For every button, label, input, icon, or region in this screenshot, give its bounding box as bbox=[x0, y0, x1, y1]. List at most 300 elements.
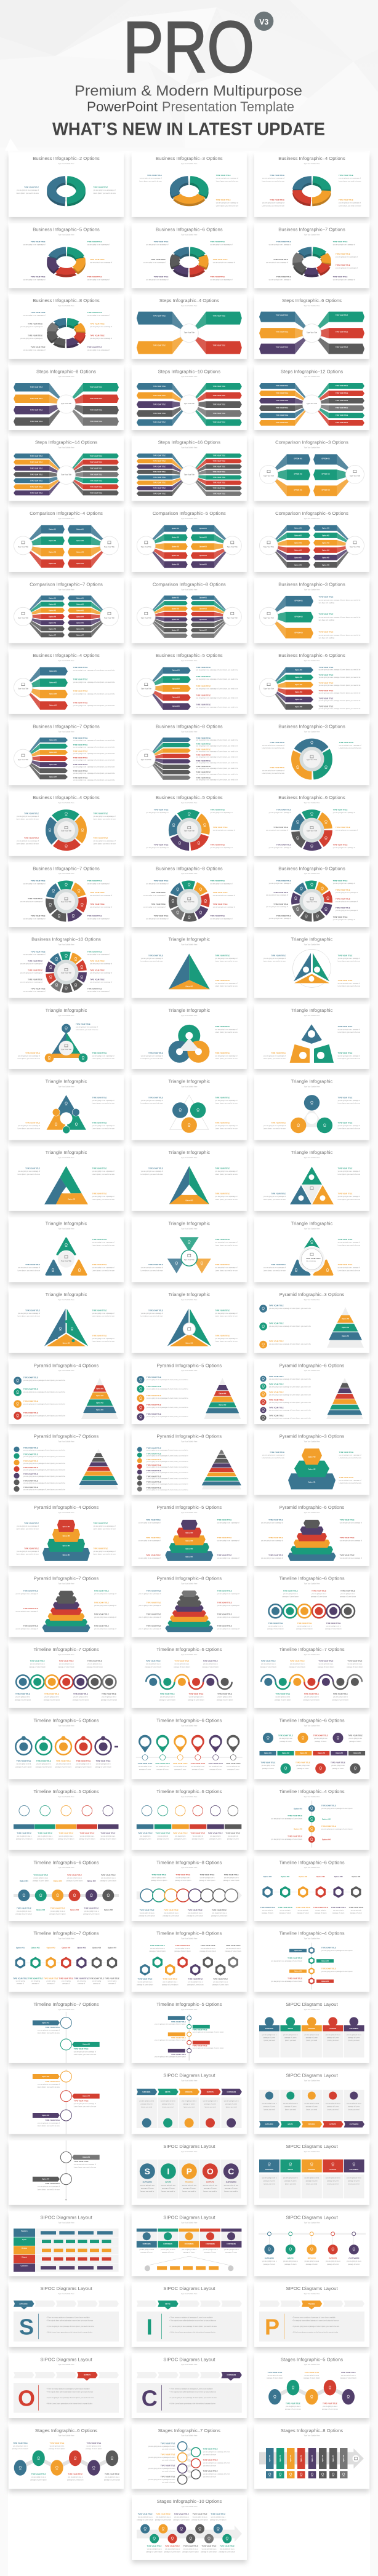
slide: comparison 4: Option #04 bbox=[76, 563, 84, 565]
slide: timeline rings 6: passage of Lorem Ipsum bbox=[325, 1628, 342, 1630]
slide: timeline loops 5: passage of Lorem Ipsum bbox=[95, 1766, 111, 1768]
slide: pyramid 7: TYPE YOUR TITLE bbox=[23, 1479, 38, 1482]
slide: business banners 7: TYPE YOUR TITLE bbox=[73, 744, 87, 746]
slide: triangle 16: Lorem Ipsum, you need to be sure bbox=[140, 1316, 163, 1318]
slide: triangle 5: TYPE YOUR TITLE bbox=[338, 1052, 353, 1054]
slide: stages 10: passage of Lorem Ipsum bbox=[219, 2551, 235, 2553]
slide: business ring 5: you are going to use a passage of bbox=[23, 244, 46, 246]
slide: steps 10 bbox=[132, 365, 247, 430]
slide: timeline alternating 6: Option #05 bbox=[336, 1752, 344, 1754]
slide: hex pyramid 8: Pyramid Infographic–8 Options bbox=[157, 1576, 222, 1581]
slide: timeline zigzag 8: TYPE YOUR TITLE bbox=[175, 1944, 190, 1947]
slide: vertical timeline part 3: TYPE YOUR TITLE bbox=[45, 2182, 60, 2185]
slide: triangle 11: Lorem Ipsum, you need to be sure bbox=[338, 1199, 361, 1201]
slide: steps 4: TYPE YOUR TITLE bbox=[213, 316, 225, 317]
slide: business ring 3: Type Your Subtitle Here bbox=[181, 163, 198, 165]
slide: timeline rings 6: TYPE YOUR TITLE bbox=[283, 1589, 298, 1592]
slide: vertical timeline part 1: TYPE YOUR TITLE bbox=[45, 2026, 60, 2029]
slide: timeline loops 5: TYPE YOUR TITLE bbox=[76, 1760, 91, 1762]
slide: triangle 10: TYPE YOUR TITLE bbox=[215, 1167, 230, 1170]
slide: timeline arrow 8: TYPE YOUR TITLE bbox=[188, 1909, 203, 1912]
slide: sipoc steps flow: passage of Lorem bbox=[204, 2252, 216, 2254]
slide: donut 4: Lorem Ipsum, you need to be sure bbox=[94, 818, 116, 820]
slide: business banners 5: Option #02 bbox=[172, 678, 180, 680]
slide: business ring 5: TYPE YOUR TITLE bbox=[90, 258, 105, 261]
slide: timeline rings 7: you are going to use a bbox=[59, 1663, 74, 1665]
slide: triangle 8: TYPE YOUR TITLE bbox=[338, 1096, 353, 1099]
slide: triangle 12: TYPE YOUR TITLE bbox=[92, 1263, 107, 1266]
slide: timeline rings 6: TYPE YOUR TITLE bbox=[297, 1622, 312, 1624]
slide: hex pyramid 4 bbox=[9, 1501, 124, 1566]
slide: timeline vertical bars 4: Option #03 bbox=[294, 1971, 302, 1973]
slide: triangle 9: Lorem Ipsum, you need to be sure bbox=[92, 1174, 115, 1175]
slide: triangle 3: Lorem Ipsum, you need to be sure bbox=[18, 1058, 41, 1060]
slide: comparison 6: Option #06 bbox=[294, 564, 302, 566]
slide: timeline bars 6: TYPE YOUR TITLE bbox=[156, 1832, 171, 1835]
slide: hex pyramid 3: Option #01 bbox=[308, 1481, 316, 1483]
slide: donut 8: TYPE YOUR TITLE bbox=[211, 880, 225, 882]
slide: timeline arrow 8: passage of Lorem Ipsum bbox=[175, 1880, 191, 1882]
slide: donut 10: Type Your Title bbox=[61, 971, 72, 974]
slide: steps 12: Steps Infographic–12 Options bbox=[281, 368, 343, 374]
slide: triangle 14 bbox=[254, 1217, 369, 1282]
slide: timeline hex 6: you are going to bbox=[333, 1909, 344, 1912]
slide: triangle 15 bbox=[9, 1289, 124, 1353]
slide: steps 8: Type Your Subtitle Here bbox=[58, 376, 74, 378]
slide: business ring 3: you are going to use a passage of bbox=[216, 178, 238, 180]
slide: donut 4: you are going to use a passage of bbox=[94, 840, 116, 842]
slide: timeline bars 5: TYPE YOUR TITLE bbox=[80, 1832, 94, 1835]
slide: hex pyramid 5: Option #02 bbox=[185, 1548, 193, 1550]
slide: donut 8: TYPE YOUR TITLE bbox=[211, 915, 225, 917]
slide: timeline hex 6: TYPE YOUR TITLE bbox=[331, 1906, 346, 1909]
slide: triangle 12: TYPE YOUR TITLE bbox=[25, 1263, 40, 1266]
slide: steps 14: TYPE YOUR TITLE bbox=[30, 462, 43, 463]
slide: sipoc O: • There are many variations of passages of Lorem Ipsum available bbox=[47, 2388, 90, 2390]
slide: hex pyramid 3: TYPE YOUR TITLE bbox=[339, 1476, 353, 1479]
slide: vertical timeline part 3: TYPE YOUR TITLE bbox=[74, 2160, 89, 2163]
slide: steps 4 bbox=[132, 295, 247, 359]
slide: timeline bars 6: you are going to bbox=[210, 1835, 220, 1837]
slide: stages 5: TYPE YOUR TITLE bbox=[286, 2403, 300, 2405]
slide: triangle 5: Lorem Ipsum, you need to be sure bbox=[338, 1058, 361, 1060]
slide: triangle 6: you are going to use a passage of bbox=[92, 1100, 115, 1102]
slide: donut 4: Business Infographic–4 Options bbox=[33, 795, 100, 800]
slide: timeline zigzag 8: you are going to use a bbox=[138, 1981, 152, 1983]
slide: timeline alternating 6: Option #04 bbox=[318, 1752, 326, 1754]
slide: donut 5: Business Infographic–5 Options bbox=[156, 795, 223, 800]
slide: business banners 6: Business Infographic–6 Options bbox=[278, 653, 345, 658]
slide: business banners 8 bbox=[132, 720, 247, 785]
slide: vertical timeline part 2: TYPE YOUR TITLE bbox=[74, 2099, 89, 2102]
slide: triangle 3: you are going to use a passage of bbox=[76, 1026, 98, 1028]
slide: steps 8: TYPE YOUR TITLE bbox=[30, 388, 43, 389]
slide: business ring 8: TYPE YOUR TITLE bbox=[90, 335, 105, 337]
slide: triangle 2 bbox=[254, 933, 369, 998]
slide: business ring 4: you are going to use a passage of bbox=[339, 178, 361, 180]
slide: timeline zigzag 8: TYPE YOUR TITLE bbox=[201, 1944, 215, 1947]
slide: triangle 7: Type Your Subtitle Here bbox=[181, 1086, 198, 1088]
slide: stages 6: passage of Lorem Ipsum bbox=[67, 2479, 83, 2481]
slide: triangle 9: Lorem Ipsum, you need to be sure bbox=[92, 1199, 115, 1201]
slide: pyramid 8: TYPE YOUR TITLE bbox=[147, 1464, 161, 1466]
slide: timeline pins 6: TYPE YOUR TITLE bbox=[226, 1762, 241, 1765]
slide: stages 7: you are going to use a passage of Lorem bbox=[203, 2462, 230, 2464]
slide: hex pyramid 3: Option #03 bbox=[308, 1456, 316, 1458]
slide: donut 10: TYPE YOUR TITLE bbox=[31, 950, 46, 953]
slide: steps 4: TYPE YOUR TITLE bbox=[153, 316, 166, 317]
slide: steps 10: Type Your Title bbox=[184, 402, 195, 405]
slide: sipoc chevrons top: Ipsum, you need bbox=[163, 2106, 174, 2108]
slide: hex pyramid 3: Lorem Ipsum, you need to be sure bbox=[339, 1457, 362, 1459]
slide: sipoc squares: OUTPUTS bbox=[329, 2169, 337, 2171]
slide: timeline hex 7: Option #04 bbox=[62, 1946, 71, 1949]
slide: stages 7: you are going to use a passage of Lorem bbox=[148, 2479, 175, 2481]
slide: business ring 7: TYPE YOUR TITLE bbox=[336, 253, 350, 255]
slide: timeline zigzag 8: passage of Lorem Ipsum bbox=[225, 1950, 241, 1952]
slide: business banners 5: Option #01 bbox=[172, 670, 180, 672]
slide: timeline dots 6: Type Your Subtitle Here bbox=[58, 1867, 74, 1869]
slide: hex pyramid 8: you are going to use a passage of bbox=[139, 1628, 161, 1630]
slide: donut 9: you are going to use a passage of bbox=[269, 883, 291, 885]
slide: timeline dots 6: you are going to use a bbox=[67, 1877, 82, 1879]
slide: timeline wave 6 bbox=[132, 1644, 247, 1708]
slide: comparison 5: Option #04 bbox=[199, 555, 207, 557]
slide: sipoc S bbox=[9, 2283, 124, 2347]
slide: sipoc letters: O bbox=[207, 2166, 214, 2176]
slide: sipoc squares: PROCESS bbox=[308, 2169, 315, 2171]
slide: business banners 8: you are going to use a passage of Lorem Ipsum, you need to be bbox=[196, 750, 238, 752]
slide: triangle 8: TYPE YOUR TITLE bbox=[271, 1121, 286, 1124]
slide: sipoc squares: you are going to use a bbox=[262, 2177, 276, 2179]
slide: triangle 1: you are going to use a passage of bbox=[215, 982, 237, 984]
slide: business ring 5: Business Infographic–5 Options bbox=[33, 226, 100, 232]
slide: business banners 6: Type Your Subtitle Here bbox=[304, 660, 320, 662]
slide: comparison 3: OPTION #03 bbox=[294, 490, 302, 491]
slide: hex pyramid 7: you are going to use a passage of bbox=[94, 1616, 116, 1618]
slide: triangle 8: Lorem Ipsum, you need to be sure bbox=[338, 1102, 361, 1104]
slide: donut 8: TYPE YOUR TITLE bbox=[154, 880, 169, 882]
slide: timeline pins 6: you are going to use bbox=[191, 1766, 204, 1768]
slide: triangle 6: you are going to use a passage of bbox=[92, 1125, 115, 1127]
slide: sipoc chevrons top: CUSTOMERS bbox=[227, 2092, 236, 2093]
slide: sipoc C: CUSTOMERS bbox=[227, 2375, 236, 2376]
slide: sipoc I: INPUTS bbox=[165, 2304, 171, 2305]
slide: vertical timeline part 2: Lorem Ipsum, you need to be sure bbox=[38, 2125, 60, 2127]
slide: hex pyramid 5: TYPE YOUR TITLE bbox=[146, 1519, 161, 1521]
slide: timeline vertical bars 4: TYPE YOUR TITLE bbox=[288, 1957, 302, 1959]
slide: comparison 4: Comparison Infographic–4 Options bbox=[30, 511, 103, 516]
slide: timeline wave 7: you are going to use a bbox=[290, 1663, 305, 1665]
slide: sipoc steps flow: you are going to use a bbox=[182, 2249, 196, 2251]
slide: timeline zigzag 8: passage of Lorem Ipsum bbox=[137, 1984, 153, 1986]
slide: steps 12: TYPE YOUR TITLE bbox=[336, 415, 348, 416]
slide: triangle 2: Lorem Ipsum, you need to be sure bbox=[263, 961, 286, 963]
slide: hex pyramid 5: TYPE YOUR TITLE bbox=[217, 1536, 232, 1539]
slide: stages 7: you need to be sure bbox=[162, 2482, 175, 2484]
slide: donut 6: you are going to use a passage of bbox=[266, 830, 288, 832]
slide: steps 4: Steps Infographic–4 Options bbox=[159, 298, 219, 303]
slide: timeline rings 6: passage of Lorem Ipsum bbox=[283, 1596, 299, 1597]
slide: business ring 8: you are going to use a passage of bbox=[23, 315, 46, 317]
slide: triangle 13: TYPE YOUR TITLE bbox=[215, 1263, 230, 1266]
slide: donut 6: you are going to use a passage of bbox=[333, 847, 355, 849]
slide: stages 10: you are going to use a bbox=[183, 2548, 198, 2550]
slide: pyramid 4: TYPE YOUR TITLE bbox=[23, 1412, 38, 1414]
slide: sipoc squares: you are going to use a bbox=[326, 2177, 340, 2179]
slide: timeline wave 7: passage of Lorem Ipsum bbox=[289, 1666, 305, 1668]
slide: sipoc icons panels: Ipsum, you need bbox=[264, 2040, 275, 2041]
slide: comparison 3: Type Your Title bbox=[263, 474, 275, 477]
slide: comparison 7: Option #05 bbox=[76, 622, 84, 624]
slide: timeline bars 6: Type Your Subtitle Here bbox=[181, 1796, 198, 1798]
slide: business ring 2: TYPE YOUR TITLE bbox=[24, 186, 39, 189]
slide: sipoc C: • There are many variations of passages of Lorem Ipsum available bbox=[169, 2388, 213, 2390]
slide: hex pyramid 5: Type Your Subtitle Here bbox=[181, 1512, 198, 1514]
slide: business ring 5: TYPE YOUR TITLE bbox=[31, 276, 46, 278]
slide: triangle 12: you are going to use a passage of bbox=[18, 1267, 40, 1269]
slide: sipoc letters: you are going to use bbox=[224, 2185, 238, 2187]
slide: stages 10: TYPE YOUR TITLE bbox=[147, 2545, 162, 2547]
slide: timeline arrow 8: you are going to use a bbox=[151, 1877, 166, 1878]
slide: donut 9: TYPE YOUR TITLE bbox=[336, 907, 350, 909]
slide: triangle 4: TYPE YOUR TITLE bbox=[148, 1052, 163, 1054]
slide: sipoc S: S bbox=[19, 2315, 34, 2340]
slide: timeline wave 6: Timeline Infographic–6 Options bbox=[156, 1647, 222, 1652]
slide: hex pyramid 4: Lorem Ipsum, you need to be sure bbox=[94, 1528, 116, 1530]
slide: comparison 4: Option #02 bbox=[49, 540, 57, 542]
slide: steps 10: TYPE YOUR TITLE bbox=[213, 413, 225, 415]
slide: timeline hex 7: you are going bbox=[108, 1980, 116, 1982]
slide: sipoc letters: Ipsum, you need to bbox=[224, 2191, 238, 2193]
slide: triangle 16: Lorem Ipsum, you need to be sure bbox=[215, 1316, 238, 1318]
slide: business ring 3: Lorem Ipsum, you need to be sure bbox=[216, 180, 239, 182]
slide: steps 16: TYPE YOUR TITLE bbox=[213, 472, 225, 473]
slide: timeline vertical 4: Option #03 bbox=[294, 1828, 303, 1831]
slide: triangle 2: TYPE YOUR TITLE bbox=[271, 954, 286, 956]
slide: triangle 10: TYPE YOUR TITLE bbox=[148, 1167, 163, 1170]
slide: timeline dots 6: TYPE YOUR TITLE bbox=[84, 1907, 99, 1909]
slide: pyramid 7: you are going to use a passage of Lorem Ipsum, you need to be bbox=[23, 1489, 65, 1491]
slide: triangle 15: Option #03 bbox=[63, 1343, 70, 1345]
slide: comparison 8: Type Your Title bbox=[141, 616, 151, 619]
slide: timeline rings 7: you are going to use a bbox=[44, 1696, 59, 1698]
slide: business banners 8: TYPE YOUR TITLE bbox=[196, 776, 211, 779]
slide: business ring 7: TYPE YOUR TITLE bbox=[333, 276, 348, 278]
slide: comparison 7: Comparison Infographic–7 Options bbox=[30, 582, 103, 587]
slide: sipoc squares: INPUTS bbox=[288, 2169, 293, 2171]
slide: vertical timeline part 1: Option #02 bbox=[82, 2044, 90, 2046]
slide: vertical timeline small 5 bbox=[132, 1998, 247, 2063]
slide: sipoc pins: SIPOC Diagrams Layout bbox=[286, 2214, 338, 2220]
slide: sipoc chevrons top: SUPPLIERS bbox=[142, 2092, 151, 2093]
slide: timeline dots 6: TYPE YOUR TITLE bbox=[33, 1874, 48, 1876]
slide: timeline rings 7: Type Your Subtitle Here bbox=[58, 1654, 74, 1656]
slide: business ring 5: you are going to use a passage of bbox=[90, 262, 112, 264]
slide: business ring 8: you are going to use a passage of bbox=[20, 338, 42, 340]
slide: triangle 15: TYPE YOUR TITLE bbox=[92, 1310, 107, 1312]
slide: timeline alternating 6: you are going to use bbox=[314, 1738, 328, 1739]
slide: triangle 8: Type Your Subtitle Here bbox=[304, 1086, 320, 1088]
slide: sipoc S: SUPPLIERS bbox=[19, 2304, 28, 2305]
slide: donut 8: TYPE YOUR TITLE bbox=[154, 915, 169, 917]
slide: sipoc O: O bbox=[18, 2385, 35, 2411]
slide: steps 16: TYPE YOUR TITLE bbox=[153, 456, 166, 457]
slide: comparison 6: Option #01 bbox=[322, 527, 330, 529]
slide: sipoc squares: passage of Lorem bbox=[263, 2180, 275, 2182]
slide: triangle 5 bbox=[254, 1004, 369, 1069]
slide: vertical timeline part 2: Lorem Ipsum, you need to be sure bbox=[38, 2086, 60, 2088]
slide: business ring 4: TYPE YOUR TITLE bbox=[339, 174, 353, 177]
slide: vertical timeline small 5: Timeline Infographic–5 Options bbox=[156, 2002, 222, 2007]
slide: triangle 14: Lorem Ipsum, you need to be sure bbox=[338, 1244, 361, 1246]
slide: sipoc letters: passage of Lorem bbox=[204, 2188, 217, 2190]
slide: sipoc pins: passage of Lorem bbox=[284, 2264, 296, 2265]
slide: stages 6: TYPE YOUR TITLE bbox=[68, 2473, 82, 2475]
slide: sipoc pins: you are going to use a bbox=[326, 2260, 340, 2262]
slide: stages 10: passage of Lorem Ipsum bbox=[201, 2551, 217, 2553]
slide: triangle 11 bbox=[254, 1147, 369, 1211]
slide: timeline rings 7: passage of Lorem Ipsum bbox=[44, 1699, 60, 1701]
slide: donut 4: you are going to use a passage of bbox=[17, 816, 39, 817]
slide: timeline arrow 8: you are going to use a bbox=[224, 1877, 239, 1878]
slide: comparison 5: Option #03 bbox=[172, 546, 179, 547]
slide: business banners 7: you are going to use a passage of Lorem Ipsum, you need to be bbox=[73, 746, 115, 748]
slide: business ring 4: TYPE YOUR TITLE bbox=[270, 199, 284, 201]
slide: stages 7: Stages Infographic–7 Options bbox=[158, 2428, 220, 2433]
slide: business banners 3: sure there isn't anything bbox=[319, 619, 335, 621]
slide: timeline bars 5: you are going to use a bbox=[58, 1835, 73, 1837]
slide: sipoc squares: SIPOC Diagrams Layout bbox=[286, 2144, 338, 2149]
slide: timeline arrow 8: TYPE YOUR TITLE bbox=[224, 1874, 239, 1876]
slide: timeline bars 5: Type Your Subtitle Here bbox=[58, 1796, 74, 1798]
slide: pyramid 4: TYPE YOUR TITLE bbox=[23, 1377, 38, 1379]
slide: steps 16: Steps Infographic–16 Options bbox=[158, 440, 220, 445]
slide: timeline alternating 6: TYPE YOUR TITLE bbox=[331, 1762, 345, 1764]
slide: business ring 6: Type Your Subtitle Here bbox=[181, 234, 198, 236]
slide: steps 8: Type Your Title bbox=[61, 402, 72, 405]
slide: pyramid 4: TYPE YOUR TITLE bbox=[23, 1388, 38, 1391]
slide: business ring 8: Business Infographic–8 Options bbox=[33, 298, 100, 303]
slide: sipoc steps flow: passage of Lorem bbox=[141, 2252, 153, 2254]
slide: donut 7: TYPE YOUR TITLE bbox=[87, 880, 102, 882]
slide: triangle 13: Type Your Subtitle Here bbox=[181, 1228, 198, 1230]
slide: timeline dots 6: passage of Lorem Ipsum bbox=[49, 1914, 66, 1915]
slide: sipoc O bbox=[9, 2353, 124, 2418]
slide: donut 4: you are going to use a passage of bbox=[17, 840, 39, 842]
slide: timeline hex 7: Timeline Infographic–7 Options bbox=[33, 1931, 99, 1936]
slide: vertical timeline part 2 bbox=[9, 2069, 124, 2134]
slide: timeline arrow 8: you are going to use a bbox=[200, 1877, 214, 1878]
slide: stages 6: TYPE YOUR TITLE bbox=[13, 2442, 28, 2444]
slide: business banners 4: TYPE YOUR TITLE bbox=[73, 666, 87, 669]
slide: triangle 4: you are going to use a passage of bbox=[141, 1055, 163, 1057]
slide: steps 16: TYPE YOUR TITLE bbox=[153, 477, 166, 479]
slide: pyramid 7: TYPE YOUR TITLE bbox=[23, 1486, 38, 1489]
slide: pyramid 8: TYPE YOUR TITLE bbox=[147, 1481, 161, 1484]
slide: business banners 7: TYPE YOUR TITLE bbox=[73, 770, 87, 773]
slide: timeline zigzag 8: you are going to use a bbox=[163, 1981, 177, 1983]
slide: comparison 3: OPTION #02 bbox=[294, 474, 302, 475]
slide: sipoc letters: SUPPLIERS bbox=[143, 2181, 152, 2184]
slide: triangle 8: Lorem Ipsum, you need to be sure bbox=[338, 1127, 361, 1129]
slide: donut 9: Business Infographic–9 Options bbox=[278, 865, 345, 871]
slide: steps 12: TYPE YOUR TITLE bbox=[276, 408, 289, 409]
slide: stages 7: TYPE YOUR TITLE bbox=[161, 2475, 175, 2478]
slide: stages 10: passage of Lorem Ipsum bbox=[183, 2551, 199, 2553]
slide: timeline vertical bars 4: TYPE YOUR TITLE bbox=[288, 1977, 302, 1979]
slide: sipoc O: • If you are going to use a passage of Lorem Ipsum, you need to be sure bbox=[47, 2397, 94, 2399]
slide: comparison 6: Type Your Title bbox=[350, 546, 361, 548]
slide: donut 5: Type Your Subtitle Here bbox=[181, 802, 198, 804]
slide: sipoc S: • The majority have suffered alteration in some form by injected humour bbox=[47, 2320, 93, 2322]
slide: timeline dots 6: passage of Lorem Ipsum bbox=[16, 1914, 32, 1915]
slide: sipoc squares: SUPPLIERS bbox=[265, 2169, 273, 2171]
slide: timeline alternating 6: Timeline Infographic–6 Options bbox=[279, 1717, 345, 1723]
slide: timeline alternating 6: Option #06 bbox=[353, 1752, 361, 1754]
slide: business ring 7: you are going to use a passage of bbox=[269, 279, 291, 281]
slide: sipoc letters: passage of Lorem bbox=[162, 2188, 175, 2190]
slide: stages 6: you are going to use a bbox=[50, 2446, 64, 2447]
slide: stages 5: passage of Lorem Ipsum bbox=[267, 2377, 283, 2379]
slide: donut 3: Business Infographic–3 Options bbox=[278, 723, 345, 729]
slide: pyramid 7: TYPE YOUR TITLE bbox=[23, 1453, 38, 1456]
slide: triangle 16: TYPE YOUR TITLE bbox=[148, 1310, 163, 1312]
slide: triangle 12: TYPE YOUR TITLE bbox=[92, 1238, 107, 1241]
slide: business ring 4: Business Infographic–4 Options bbox=[278, 156, 345, 161]
slide: stages 6: Stages Infographic–6 Options bbox=[35, 2428, 97, 2433]
slide: hex pyramid 6: TYPE YOUR TITLE bbox=[268, 1519, 283, 1521]
slide: timeline wave 7: passage of Lorem Ipsum bbox=[332, 1699, 348, 1701]
slide: triangle 10: you are going to use a passage of bbox=[141, 1171, 163, 1172]
slide: sipoc P: • All the Lorem Ipsum generators on the Internet tend to repeat chunks bbox=[292, 2332, 339, 2334]
slide: timeline hex 7: passage of bbox=[78, 1982, 85, 1984]
slide: pyramid 8: you are going to use a passage of Lorem Ipsum, you need to be bbox=[147, 1461, 188, 1463]
slide: triangle 14: TYPE YOUR TITLE bbox=[306, 1257, 321, 1260]
slide: timeline arrow 8: passage of Lorem Ipsum bbox=[199, 1880, 215, 1882]
slide: donut 9: TYPE YOUR TITLE bbox=[276, 915, 291, 917]
slide: triangle 7: Lorem Ipsum, you need to be sure bbox=[140, 1102, 163, 1104]
slide: timeline rings 7: passage of Lorem Ipsum bbox=[73, 1699, 89, 1701]
slide: steps 16: TYPE YOUR TITLE bbox=[153, 472, 166, 473]
slide: timeline loops 5: you are going to use a bbox=[56, 1763, 71, 1765]
slide: steps 14: TYPE YOUR TITLE bbox=[90, 468, 103, 469]
slide: sipoc icons panels: SIPOC Diagrams Layout bbox=[286, 2002, 338, 2007]
slide: vertical timeline part 2: TYPE YOUR TITLE bbox=[45, 2119, 60, 2121]
slide: timeline rings 7: TYPE YOUR TITLE bbox=[30, 1660, 45, 1663]
slide: business banners 7: Business Infographic–7 Options bbox=[33, 723, 100, 729]
slide: stages 10: TYPE YOUR TITLE bbox=[211, 2513, 225, 2515]
slide: timeline bars 5: passage of Lorem Ipsum bbox=[79, 1839, 95, 1840]
slide: sipoc pins: passage of Lorem bbox=[306, 2264, 318, 2265]
slide: triangle 10: Option #03 bbox=[185, 1200, 193, 1202]
slide: business ring 6: TYPE YOUR TITLE bbox=[211, 241, 225, 243]
slide: business banners 8: TYPE YOUR TITLE bbox=[196, 737, 211, 739]
slide: timeline hex 6: you are going to bbox=[315, 1909, 326, 1912]
slide: pyramid 8: TYPE YOUR TITLE bbox=[147, 1475, 161, 1477]
slide: pyramid 3 bbox=[254, 1289, 369, 1353]
slide: stages 5: Stages Infographic–5 Options bbox=[281, 2356, 343, 2362]
slide: business ring 8: you are going to use a passage of bbox=[90, 338, 112, 340]
slide: timeline hex 6: Option #02 bbox=[281, 1875, 290, 1878]
slide: business banners 3 bbox=[254, 578, 369, 643]
slide: timeline wave 7: you are going to use a bbox=[333, 1696, 348, 1698]
slide: timeline zigzag 8: passage of Lorem Ipsum bbox=[187, 1984, 203, 1986]
slide: triangle 2: you are going to use a passage of bbox=[338, 958, 360, 960]
slide: stages 6: passage of Lorem Ipsum bbox=[86, 2448, 102, 2450]
slide: timeline hex 7: passage of bbox=[17, 1982, 24, 1984]
slide: triangle 7: Lorem Ipsum, you need to be sure bbox=[215, 1127, 238, 1129]
